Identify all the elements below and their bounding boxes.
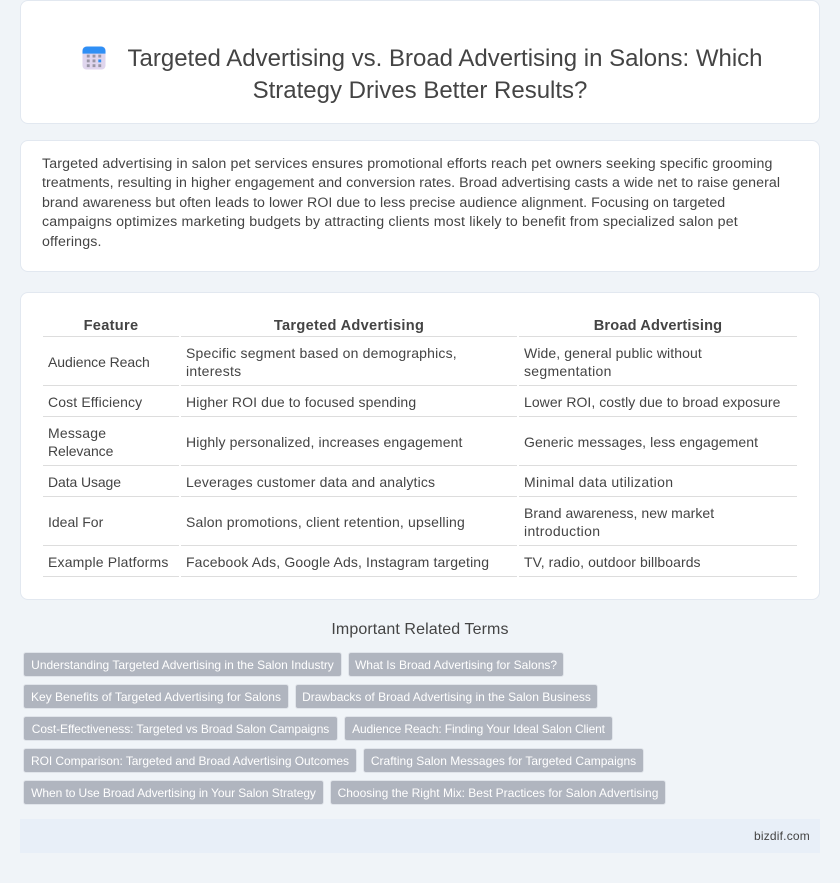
row: Example Platforms: Example Platforms [48, 554, 169, 570]
tag: Key Benefits of Targeted Advertising for Salons [31, 690, 281, 704]
intro paragraph: campaigns optimizes marketing budgets by attracting clients most likely to benefit from specialized salon pet [42, 214, 738, 230]
cell: broad data: Minimal data utilization [524, 474, 673, 490]
tag [23, 748, 357, 773]
row: Message Relevance [48, 425, 113, 459]
cell: broad cost: Lower ROI, costly due to broad exposure [524, 394, 780, 410]
row: Audience Reach: Audience Reach [48, 354, 150, 370]
cell: broad message: Generic messages, less engagement [524, 434, 758, 450]
tag [344, 716, 613, 741]
cell: broad ideal [524, 505, 714, 539]
row: Ideal For: Ideal For [48, 514, 103, 530]
tag [363, 748, 644, 773]
tag: What Is Broad Advertising for Salons? [355, 658, 557, 672]
intro paragraph: brand awareness but often leads to lower ROI due to less precise audience alignment. Focusing on targeted [42, 194, 725, 210]
tag [23, 780, 324, 805]
tag: Crafting Salon Messages for Targeted Campaigns [371, 754, 636, 768]
icon: calendar [82, 46, 106, 70]
tag [330, 780, 666, 805]
tag [23, 716, 338, 741]
row: Message Relevance: Message [48, 425, 106, 441]
tag: Choosing the Right Mix: Best Practices for Salon Advertising [338, 786, 658, 800]
cell: targeted ideal: Salon promotions, client retention, upselling [186, 514, 465, 530]
tag: ROI Comparison: Targeted and Broad Advertising Outcomes [31, 754, 349, 768]
row: Data Usage: Data Usage [48, 474, 121, 490]
panel: comparison table [20, 292, 820, 600]
cell: broad ideal: Brand awareness, new market [524, 505, 714, 521]
tag [23, 684, 289, 709]
cell: targeted platforms: Facebook Ads, Google Ads, Instagram targeting [186, 554, 489, 570]
tag [348, 652, 564, 677]
heading: related terms: Important Related Terms [331, 621, 509, 638]
title: Strategy Drives Better Results? [253, 77, 587, 104]
cell: broad platforms: TV, radio, outdoor billboards [524, 554, 701, 570]
title [128, 45, 762, 104]
tag: Audience Reach: Finding Your Ideal Salon Client [352, 722, 605, 736]
footer credit: bizdif.com [754, 829, 810, 843]
cell: targeted cost: Higher ROI due to focused spending [186, 394, 416, 410]
intro paragraph [42, 156, 780, 250]
cell: broad reach [524, 345, 702, 379]
intro paragraph: treatments, resulting in higher engagement and conversion rates. Broad advertising casts a wide net to raise general [42, 175, 780, 191]
panel: intro text [20, 140, 820, 272]
tag: Cost-Effectiveness: Targeted vs Broad Salon Campaigns [32, 722, 329, 736]
intro paragraph: offerings. [42, 234, 102, 250]
row: Message Relevance: Relevance [48, 443, 113, 459]
footer bar [20, 819, 820, 853]
cell: targeted data: Leverages customer data and analytics [186, 474, 435, 490]
tag: Drawbacks of Broad Advertising in the Salon Business [302, 690, 591, 704]
cell: broad reach: segmentation [524, 363, 612, 379]
cell: targeted reach: Specific segment based on demographics, [186, 345, 457, 361]
header panel [20, 0, 820, 124]
title: Targeted Advertising vs. Broad Advertising in Salons: Which [128, 45, 762, 72]
tag: When to Use Broad Advertising in Your Salon Strategy [31, 786, 316, 800]
cell: targeted reach [186, 345, 457, 379]
cell: broad reach: Wide, general public without [524, 345, 702, 361]
tag: Understanding Targeted Advertising in the Salon Industry [31, 658, 334, 672]
intro paragraph: Targeted advertising in salon pet services ensures promotional efforts reach pet owners seeking specific grooming [42, 156, 772, 172]
cell: broad ideal: introduction [524, 523, 600, 539]
table header: Broad Advertising: Broad Advertising [594, 318, 722, 334]
tag [295, 684, 598, 709]
table header: Feature: Feature [84, 318, 138, 334]
table header: Targeted Advertising: Targeted Advertising [274, 318, 424, 334]
row: Cost Efficiency: Cost Efficiency [48, 394, 142, 410]
tag [23, 652, 342, 677]
tag group: related terms [23, 652, 666, 805]
cell: targeted reach: interests [186, 363, 241, 379]
cell: targeted message: Highly personalized, increases engagement [186, 434, 463, 450]
